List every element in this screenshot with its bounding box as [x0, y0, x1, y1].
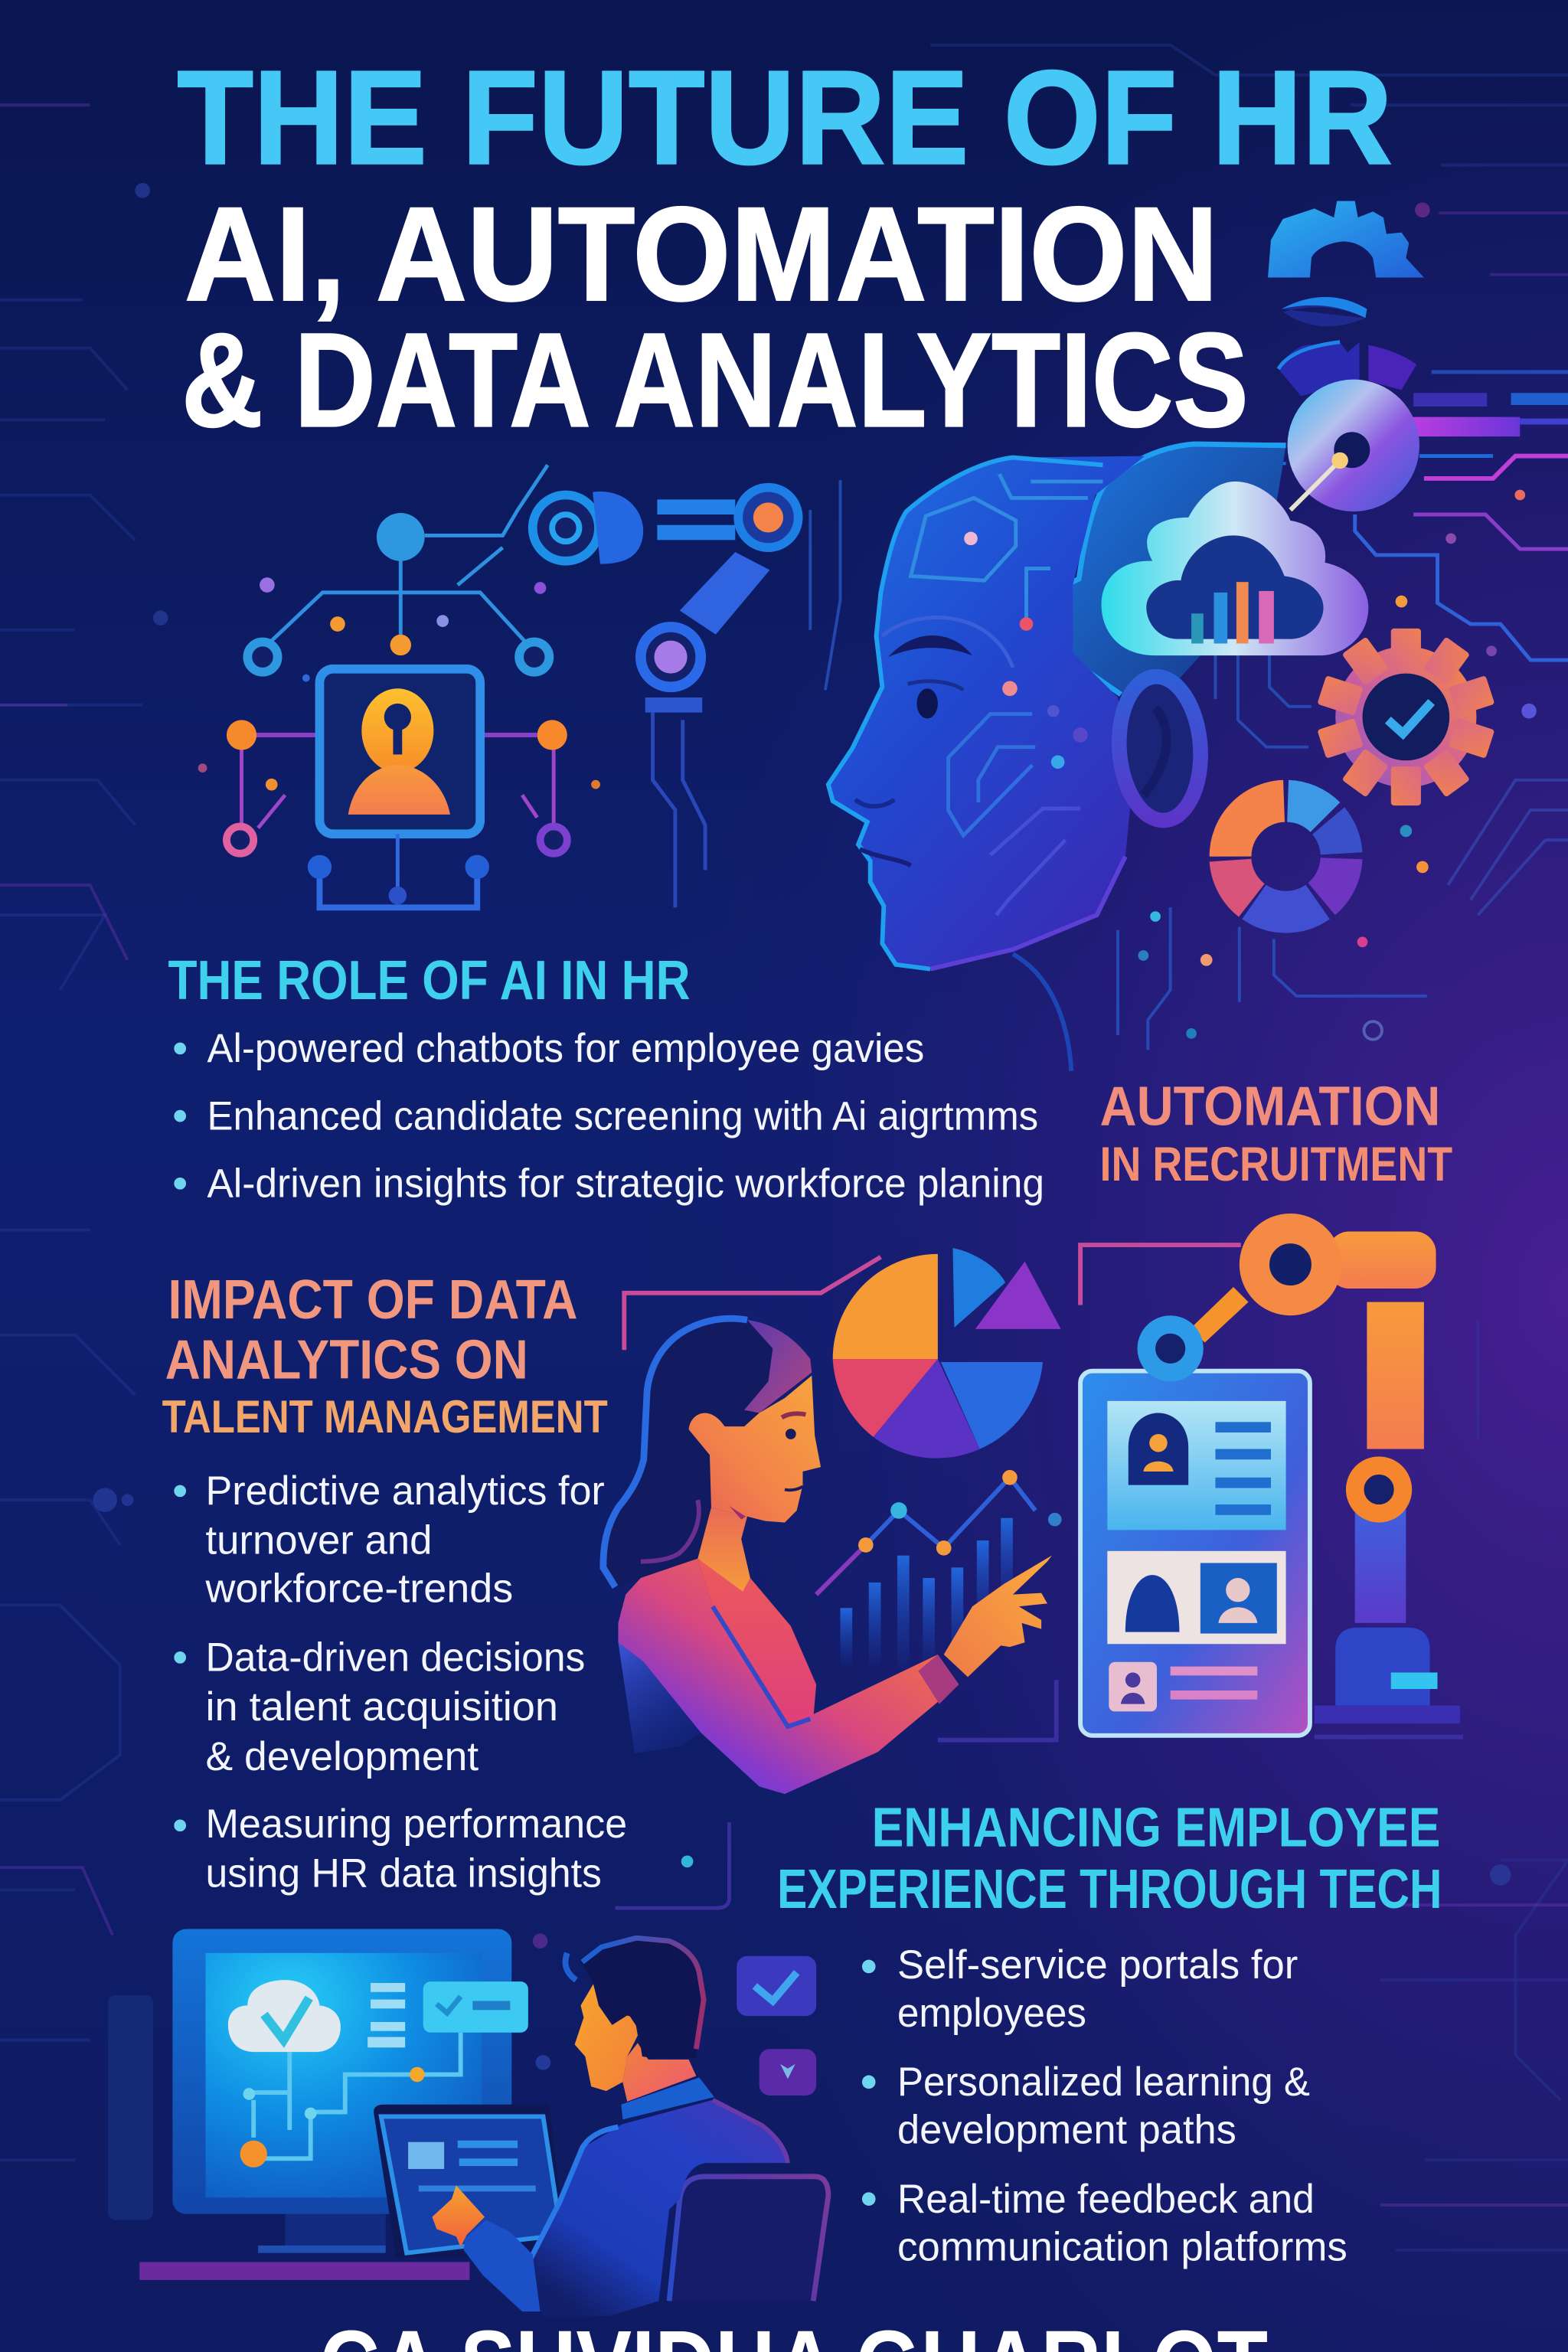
bullet list: communication platforms	[897, 2224, 1348, 2269]
heading: ANALYTICS ON	[165, 1329, 528, 1390]
bullet list: turnover and	[205, 1518, 432, 1563]
pie chart	[833, 1248, 1061, 1459]
icon: check tile small	[760, 2049, 816, 2096]
disc connector	[1279, 297, 1568, 511]
bullet list: employees	[897, 1991, 1086, 2036]
woman face	[689, 1376, 821, 1523]
candidate card	[1080, 1371, 1310, 1736]
person collar	[621, 2077, 714, 2119]
head back cap	[1063, 444, 1286, 705]
person neck	[622, 2043, 696, 2102]
HR security network icon	[198, 465, 600, 907]
recruitment robot and candidate card	[938, 1229, 1463, 1740]
title line 1: THE FUTURE OF HR	[177, 43, 1393, 192]
panel: the role of AI in HR	[168, 949, 1044, 1206]
bullet list: Measuring performance	[205, 1802, 627, 1847]
robot arm icon	[533, 488, 799, 907]
bullet list	[862, 1942, 1348, 2269]
heading: THE ROLE OF AI IN HR	[168, 949, 691, 1011]
icon: user with keyhole	[348, 688, 450, 815]
woman neck	[697, 1508, 750, 1592]
heading: IMPACT OF DATA	[168, 1269, 578, 1331]
woman torso	[697, 1559, 816, 1726]
HR profile tile	[319, 669, 480, 834]
heading: automation in recruitment: IN RECRUITMENT	[1100, 1138, 1452, 1191]
AI head illustration	[810, 201, 1568, 1071]
woman sleeve and arm	[618, 1559, 959, 1794]
bullet list	[174, 1026, 1044, 1206]
panel: enhancing employee experience	[777, 1797, 1442, 2269]
heading	[162, 1269, 608, 1442]
profile panel	[1107, 1401, 1286, 1530]
cloud	[1101, 482, 1368, 655]
bullet list: Self-service portals for	[897, 1942, 1298, 1988]
person hair	[566, 1938, 704, 2058]
icon: donut chart	[1230, 801, 1341, 912]
icon: gear top	[1268, 201, 1424, 277]
face circuits	[882, 474, 1102, 915]
person hand	[432, 2186, 485, 2247]
heading: TALENT MANAGEMENT	[162, 1390, 608, 1442]
woman hair	[603, 1318, 812, 1587]
ear	[1115, 674, 1205, 823]
robot arm	[1190, 1229, 1460, 1723]
person arm	[464, 2220, 541, 2311]
neck line	[1013, 954, 1071, 1071]
eye and brow	[888, 635, 972, 657]
heading: automation in recruitment: AUTOMATION	[1100, 1075, 1440, 1137]
bullet list: Predictive analytics for	[205, 1468, 605, 1514]
small profile row	[1109, 1662, 1257, 1711]
bullet list: Real-time feedbeck and	[897, 2177, 1315, 2222]
title	[177, 43, 1393, 454]
icon: gear check	[1317, 629, 1494, 805]
bullet list: Al-powered chatbots for employee gavies	[207, 1026, 924, 1071]
line chart	[816, 1470, 1062, 1668]
bullet list: development paths	[897, 2108, 1236, 2153]
desk	[139, 2262, 469, 2280]
heading: automation in recruitment	[1100, 1075, 1452, 1191]
bullet list: Personalized learning &	[897, 2060, 1310, 2105]
bullet list: Data-driven decisions	[205, 1635, 585, 1681]
icon: check tile large	[737, 1956, 816, 2016]
interview panel	[1107, 1551, 1286, 1644]
person body	[522, 2100, 788, 2316]
bullet list: workforce-trends	[204, 1566, 513, 1611]
woman analysing data illustration	[603, 1248, 1062, 1794]
tablet	[374, 2105, 567, 2258]
panel: impact of data analytics	[162, 1269, 627, 1896]
bullet list: in talent acquisition	[205, 1684, 558, 1730]
person face	[575, 1980, 638, 2091]
face	[828, 456, 1145, 969]
monitor	[172, 1929, 528, 2253]
title line 3: & DATA ANALYTICS	[181, 305, 1249, 454]
heading	[777, 1797, 1442, 1920]
heading: ENHANCING EMPLOYEE	[872, 1797, 1440, 1859]
bullet list: using HR data insights	[205, 1851, 602, 1896]
bullet list	[174, 1468, 627, 1896]
woman back	[618, 1642, 701, 1753]
employee at computer illustration	[108, 1822, 828, 2316]
connectors	[255, 733, 537, 737]
icon: cloud check	[228, 1980, 341, 2052]
chair	[669, 2177, 828, 2301]
bullet list: Enhanced candidate screening with Ai aigrtmms	[207, 1093, 1038, 1138]
woman hand	[944, 1556, 1052, 1677]
bullet list: & development	[205, 1734, 479, 1779]
bullet list: Al-driven insights for strategic workforce planing	[207, 1161, 1044, 1206]
status card	[423, 1981, 528, 2033]
title line 2: AI, AUTOMATION	[185, 179, 1218, 328]
